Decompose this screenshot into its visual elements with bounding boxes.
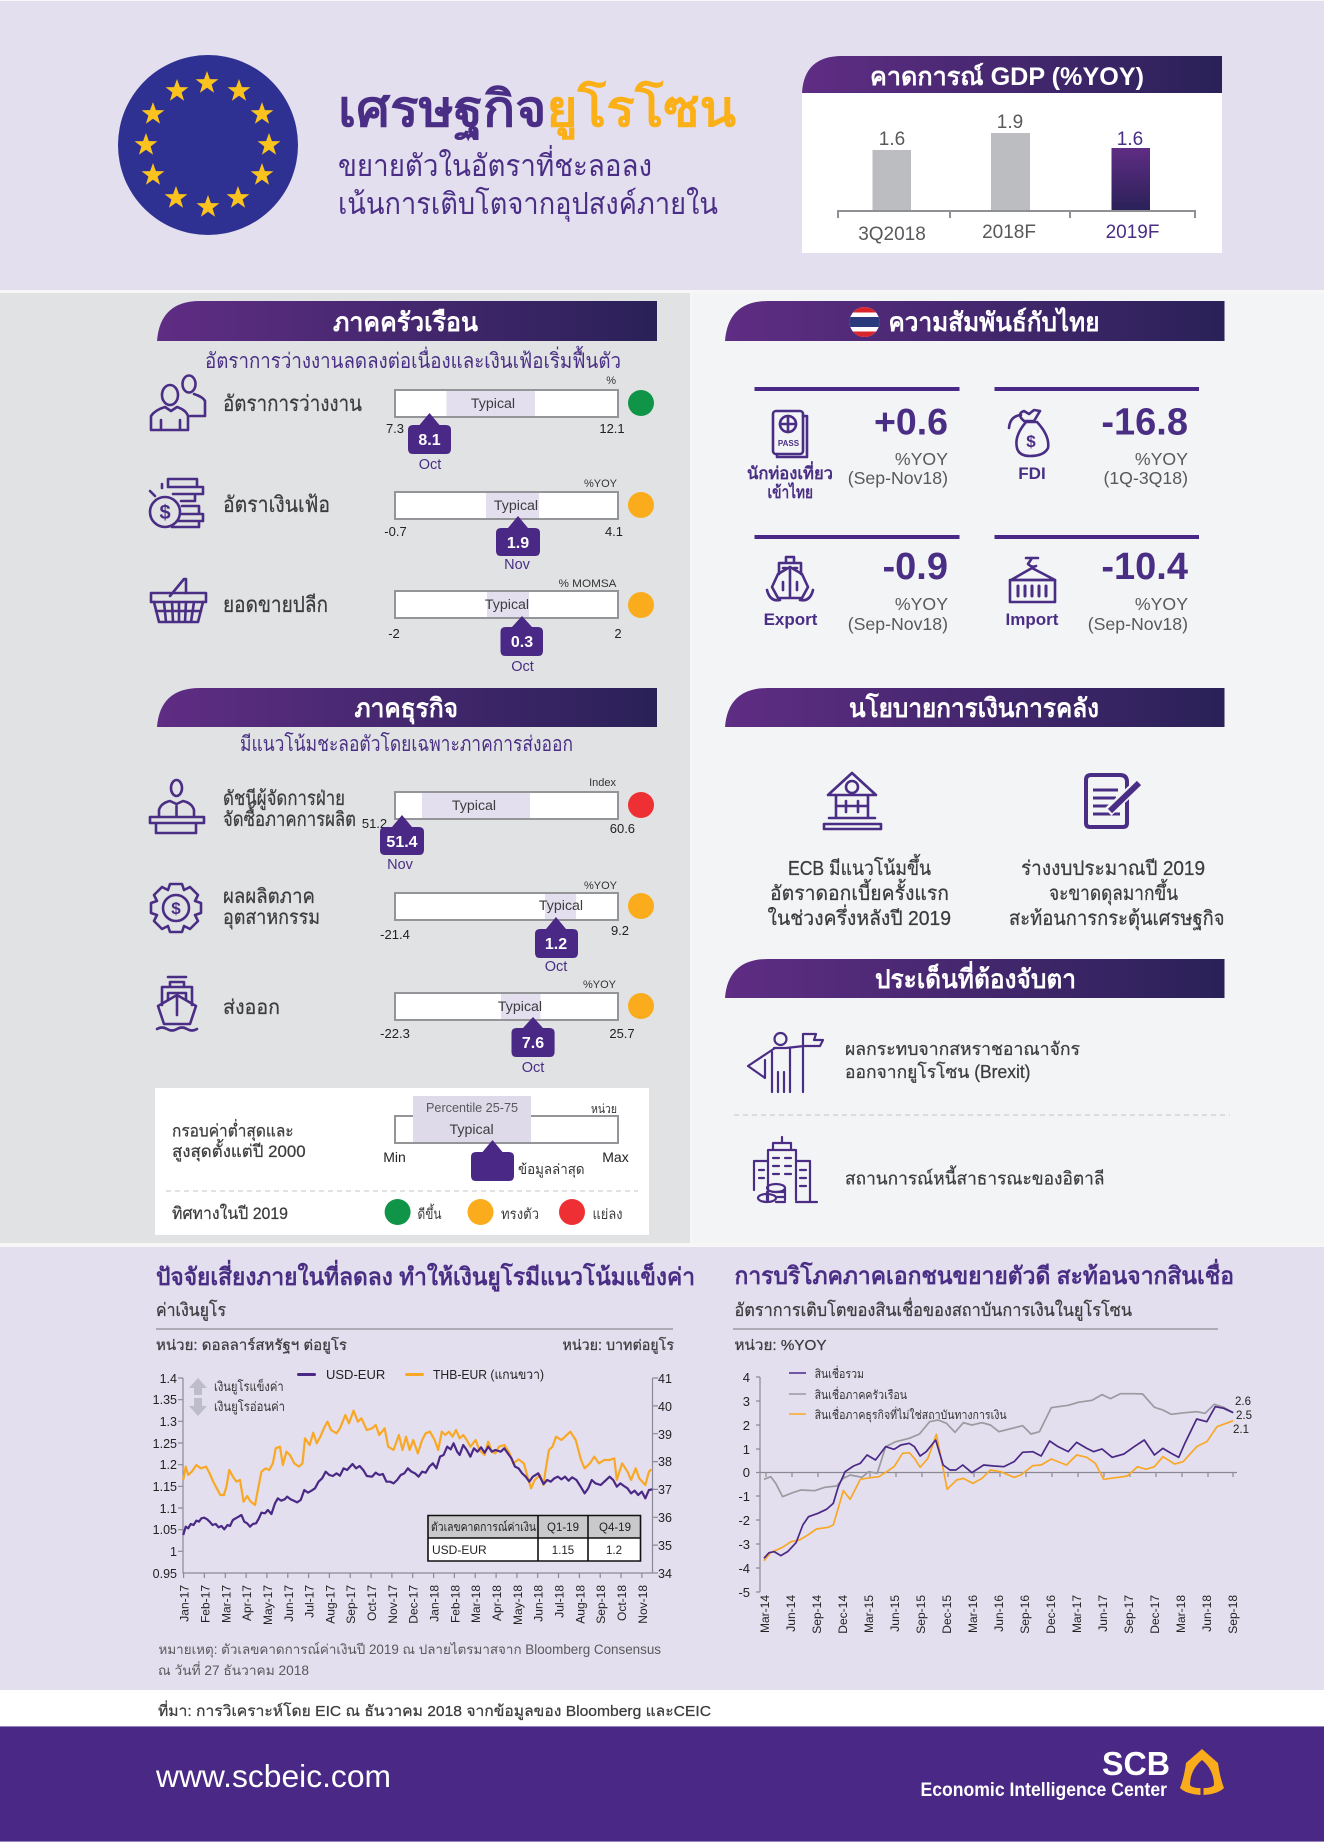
status dot	[628, 592, 654, 618]
end labels: 2.6	[1235, 1396, 1251, 1408]
range bar	[386, 375, 625, 436]
x axis labels: Feb-18	[448, 1585, 462, 1623]
x axis labels: May-17	[261, 1585, 275, 1625]
x axis labels: Jan-18	[428, 1585, 442, 1622]
value	[848, 400, 948, 488]
pointer: Oct	[522, 1060, 544, 1076]
x axis labels: Apr-17	[240, 1585, 254, 1621]
bar chart: GDP: 1.9	[997, 112, 1023, 133]
x axis labels: Sep-14	[810, 1595, 824, 1634]
y axis labels: 3	[743, 1394, 750, 1409]
heading: business: ภาคธุรกิจ	[354, 693, 458, 725]
icon: Thai flag	[849, 307, 880, 337]
pointer: Oct	[419, 457, 441, 473]
left axis labels: 1.25	[153, 1437, 177, 1451]
range bar: Typical	[539, 898, 583, 914]
range bar: Typical	[498, 999, 542, 1015]
label	[223, 788, 356, 831]
end labels: 2.5	[1236, 1410, 1252, 1422]
pointer: 0.3	[511, 634, 533, 651]
range bar: -22.3	[380, 1026, 410, 1041]
range bar: -21.4	[380, 927, 410, 942]
panel: legend	[155, 1088, 649, 1235]
x axis labels: Mar-15	[862, 1595, 876, 1633]
text: right unit: หน่วย: บาทต่อยูโร	[562, 1336, 674, 1354]
status dot	[628, 993, 654, 1019]
forecast table: USD-EUR	[432, 1543, 487, 1557]
x axis labels: Jan-17	[178, 1585, 192, 1622]
text: budget: ร่างงบประมาณปี 2019	[1021, 858, 1205, 880]
range bar	[380, 979, 635, 1041]
x axis labels: Jun-16	[992, 1595, 1006, 1632]
range bar: Typical	[485, 597, 529, 613]
icon: budget document	[1086, 775, 1139, 827]
icon: EU flag	[118, 55, 298, 235]
x axis labels: Mar-16	[966, 1595, 980, 1633]
stat: import	[994, 535, 1199, 634]
status dot	[628, 492, 654, 518]
footer	[0, 1726, 1324, 1842]
x axis labels: Oct-18	[615, 1585, 629, 1621]
range bar: 51.2	[362, 816, 387, 831]
x axis labels: Sep-17	[1122, 1595, 1136, 1634]
pointer: 7.6	[522, 1035, 544, 1052]
heading: business	[157, 688, 657, 727]
status dot	[628, 893, 654, 919]
x axis labels: Jul-17	[303, 1585, 317, 1618]
text: direction: ทิศทางในปี 2019	[172, 1203, 288, 1223]
icon label: PASS: PASS	[778, 439, 800, 448]
direction arrows: เงินยูโรอ่อนค่า	[214, 1399, 285, 1415]
left axis labels: 1.3	[160, 1415, 177, 1429]
note	[158, 1641, 661, 1678]
x axis labels	[758, 1595, 1240, 1634]
range bar: 12.1	[599, 421, 625, 436]
label: ผลผลิตภาค	[223, 886, 315, 908]
x axis labels: Apr-18	[490, 1585, 504, 1621]
icon: basket	[151, 579, 206, 622]
value: %YOY	[895, 594, 948, 614]
x axis labels: Jun-15	[888, 1595, 902, 1632]
label: ส่งออก	[223, 997, 280, 1019]
value: %YOY	[895, 449, 948, 469]
chart legend: สินเชื่อภาคธุรกิจที่ไม่ใช่สถาบันทางการเงิน	[815, 1406, 1007, 1423]
series: USD-EUR	[183, 1443, 652, 1535]
range bar: %YOY	[583, 979, 617, 991]
range bar: Typical	[471, 396, 515, 412]
pointer: Oct	[511, 659, 534, 675]
label: Import	[1006, 610, 1059, 629]
left axis labels: 1.2	[160, 1458, 177, 1472]
pointer: 51.4	[386, 834, 418, 851]
pointer: Nov	[504, 557, 531, 573]
range bar: %	[606, 375, 616, 387]
right axis labels: 34	[658, 1567, 672, 1581]
direction legend: ดีขึ้น	[418, 1203, 442, 1223]
bar chart: GDP: 2019F	[1106, 222, 1159, 243]
x axis labels: Jun-17	[282, 1585, 296, 1622]
x axis labels: Jun-18	[1200, 1595, 1214, 1632]
label: Export	[764, 610, 818, 629]
x axis labels: Jun-17	[1096, 1595, 1110, 1632]
bar chart: GDP: 2018F	[982, 222, 1036, 243]
range bar: 60.6	[610, 821, 635, 836]
icon: passport	[773, 411, 807, 457]
heading: monetary and fiscal policy	[725, 688, 1224, 727]
forecast table: 1.2	[606, 1545, 622, 1557]
range bar: 2	[614, 626, 622, 641]
row: industrial production	[151, 880, 654, 975]
y axis labels: -3	[738, 1537, 750, 1552]
icon: ship	[157, 977, 197, 1030]
x axis labels: Mar-14	[758, 1595, 772, 1633]
right axis labels: 38	[658, 1455, 672, 1469]
x axis labels: Dec-14	[836, 1595, 850, 1634]
pointer: Nov	[387, 857, 414, 873]
range bar	[384, 478, 623, 539]
range bar: %YOY	[584, 880, 618, 892]
value	[1101, 402, 1188, 488]
value	[848, 546, 948, 634]
range bar: Typical	[452, 798, 496, 814]
end labels	[1233, 1396, 1252, 1436]
value: %YOY	[1135, 594, 1188, 614]
range bar: %YOY	[584, 478, 618, 490]
x axis labels: Sep-18	[1226, 1595, 1240, 1634]
text: Brexit: ออกจากยูโรโซน (Brexit)	[845, 1061, 1030, 1083]
x axis labels: Aug-17	[323, 1585, 337, 1624]
x axis labels: Sep-17	[344, 1585, 358, 1624]
panel: left economy column	[0, 293, 690, 1243]
y axis labels	[738, 1370, 750, 1600]
range bar	[362, 777, 635, 836]
label: นักท่องเที่ยว	[747, 461, 833, 483]
pointer	[535, 917, 578, 975]
y axis labels: 2	[743, 1418, 750, 1433]
title: เศรษฐกิจ ยูโรโซน	[338, 79, 736, 141]
y axis labels: -2	[738, 1513, 750, 1528]
text: credit unit: หน่วย: %YOY	[734, 1338, 827, 1354]
value: (Sep-Nov18)	[848, 468, 948, 488]
chart legend: สินเชื่อรวม	[815, 1365, 864, 1381]
label: จัดซื้อภาคการผลิต	[223, 805, 356, 831]
status dot	[628, 390, 654, 416]
value: (Sep-Nov18)	[848, 614, 948, 634]
icon: coins	[150, 479, 203, 527]
forecast table: Q4-19	[599, 1522, 631, 1534]
top band	[0, 1, 1324, 290]
direction arrows	[189, 1377, 285, 1416]
x axis labels: Jun-18	[532, 1585, 546, 1622]
x axis labels	[178, 1585, 650, 1625]
sample range bar	[383, 1096, 629, 1165]
y axis labels: -1	[738, 1489, 750, 1504]
value: -10.4	[1101, 546, 1188, 588]
end labels: 2.1	[1233, 1424, 1249, 1436]
chart legend: THB-EUR (แกนขวา)	[433, 1367, 544, 1382]
range bar: 7.3	[386, 421, 404, 436]
icon: city with coins	[754, 1137, 817, 1202]
pointer: 1.9	[507, 535, 529, 552]
value	[1088, 546, 1188, 634]
line chart: euro	[153, 1367, 672, 1625]
x axis labels: Dec-17	[1148, 1595, 1162, 1634]
range bar: 9.2	[611, 923, 629, 938]
text: source: ที่มา: การวิเคราะห์โดย EIC ณ ธันวาคม 2018 จากข้อมูลของ Bloomberg และCEIC	[158, 1700, 711, 1720]
logo: SCB: Economic Intelligence Center	[920, 1779, 1167, 1801]
text: euro subtitle: ค่าเงินยูโร	[156, 1299, 226, 1321]
left axis labels: 1	[170, 1545, 177, 1559]
direction legend	[385, 1199, 622, 1225]
text: ECB: ECB มีแนวโน้มขึ้น	[788, 854, 931, 880]
x axis labels: Dec-16	[1044, 1595, 1058, 1634]
text: range explanation: สูงสุดตั้งแต่ปี 2000	[172, 1139, 306, 1162]
heading: GDP forecast: คาดการณ์ GDP (%YOY)	[870, 62, 1144, 91]
heading: households: ภาคครัวเรือน	[333, 307, 478, 337]
range bar: Typical	[494, 498, 538, 514]
x axis labels: Aug-18	[573, 1585, 587, 1624]
forecast table: Q1-19	[547, 1522, 579, 1534]
series: household credit	[764, 1394, 1233, 1497]
x axis labels: Dec-17	[407, 1585, 421, 1624]
bar chart: GDP: 3Q2018	[858, 224, 926, 245]
x axis labels: Dec-15	[940, 1595, 954, 1634]
x axis labels: Sep-15	[914, 1595, 928, 1634]
range bar: % MOMSA	[558, 578, 617, 590]
left axis labels: 0.95	[153, 1567, 177, 1581]
series: THB-EUR	[183, 1411, 651, 1505]
logo: SCB	[920, 1745, 1224, 1801]
bar chart: GDP: 1.6	[1117, 129, 1143, 150]
y axis labels: 0	[743, 1465, 750, 1480]
text: ECB	[768, 854, 951, 930]
label: ดัชนีผู้จัดการฝ่าย	[223, 788, 345, 811]
x axis labels: Nov-18	[636, 1585, 650, 1624]
right axis labels: 37	[658, 1483, 672, 1497]
range bar: -0.7	[384, 524, 407, 539]
x axis labels: Mar-18	[1174, 1595, 1188, 1633]
sample pointer	[471, 1140, 584, 1181]
x axis labels: Nov-17	[386, 1585, 400, 1624]
text: website: www.scbeic.com	[155, 1758, 391, 1794]
label: FDI	[1018, 464, 1046, 483]
text: left unit: หน่วย: ดอลลาร์สหรัฐฯ ต่อยูโร	[156, 1336, 347, 1354]
right axis labels: 41	[658, 1372, 672, 1386]
value: -0.9	[883, 546, 948, 588]
range bar	[380, 880, 629, 942]
icon: people	[151, 376, 205, 430]
right axis labels: 36	[658, 1511, 672, 1525]
chart legend: สินเชื่อภาคครัวเรือน	[815, 1386, 907, 1402]
heading: households	[157, 301, 657, 341]
panel: GDP forecast	[802, 56, 1222, 253]
value: -16.8	[1101, 402, 1188, 444]
status dot	[628, 792, 654, 818]
heading: GDP forecast	[802, 56, 1222, 93]
text: Brexit: ผลกระทบจากสหราชอาณาจักร	[845, 1039, 1080, 1059]
heading: relation with Thailand: ความสัมพันธ์กับไทย	[888, 306, 1100, 337]
bar chart: GDP	[838, 112, 1195, 245]
stat: export	[754, 535, 960, 634]
sample range bar: Min	[383, 1149, 406, 1165]
icon glyph: dollar: $	[171, 899, 181, 918]
label: ยอดขายปลีก	[223, 592, 328, 617]
stat: FDI	[994, 387, 1199, 488]
forecast table: 1.15	[552, 1545, 574, 1557]
x axis labels: Jul-18	[552, 1585, 566, 1618]
pointer: 1.2	[545, 936, 567, 953]
label: อัตราการว่างงาน	[223, 391, 362, 416]
chart legend	[789, 1365, 1007, 1423]
line chart: credit	[738, 1365, 1252, 1634]
label	[747, 461, 833, 502]
chart legend	[297, 1367, 544, 1382]
forecast table	[428, 1516, 640, 1561]
heading: issues to watch: ประเด็นที่ต้องจับตา	[875, 960, 1076, 994]
text: Italy debt: สถานการณ์หนี้สาธารณะของอิตาลี	[845, 1166, 1104, 1188]
forecast table: ตัวเลขคาดการณ์ค่าเงิน	[431, 1520, 536, 1534]
x axis labels: Jun-14	[784, 1595, 798, 1632]
direction arrows: เงินยูโรแข็งค่า	[214, 1377, 284, 1395]
left axis labels: 1.4	[160, 1372, 177, 1386]
value: (1Q-3Q18)	[1103, 468, 1188, 488]
heading: monetary and fiscal policy: นโยบายการเงินการคลัง	[849, 692, 1099, 723]
icon: podium speaker	[150, 780, 204, 833]
icon: Brexit leader with flag	[748, 1033, 823, 1092]
x axis labels: Sep-16	[1018, 1595, 1032, 1634]
icon: bank	[824, 773, 881, 829]
text: budget	[1009, 858, 1224, 931]
pointer	[380, 815, 424, 873]
label: อุตสาหกรรม	[223, 907, 320, 930]
x axis labels: Mar-17	[1070, 1595, 1084, 1633]
y axis labels: 4	[743, 1370, 750, 1385]
left axis labels: 1.35	[153, 1393, 177, 1407]
right axis labels: 40	[658, 1400, 672, 1414]
icon glyph: dollar: $	[1026, 432, 1036, 451]
y axis labels: 1	[743, 1442, 750, 1457]
pointer	[408, 413, 451, 473]
chart legend: USD-EUR	[326, 1367, 385, 1382]
note: หมายเหตุ: ตัวเลขคาดการณ์ค่าเงินปี 2019 ณ ปลายไตรมาสจาก Bloomberg Consensus	[158, 1641, 661, 1658]
pointer	[496, 516, 540, 573]
subtitle: เน้นการเติบโตจากอุปสงค์ภายใน	[338, 186, 718, 223]
left axis labels	[153, 1372, 177, 1581]
source strip	[0, 1690, 1324, 1726]
x axis labels: Mar-18	[469, 1585, 483, 1623]
value: +0.6	[874, 400, 948, 442]
icon: ship	[767, 557, 813, 600]
x axis labels: Feb-17	[198, 1585, 212, 1623]
x axis labels: May-18	[511, 1585, 525, 1625]
sample pointer: ข้อมูลล่าสุด	[518, 1161, 584, 1178]
heading: relation with Thailand	[725, 301, 1224, 341]
row: PMI	[150, 777, 654, 873]
left axis labels: 1.05	[153, 1523, 177, 1537]
range bar: 25.7	[609, 1026, 635, 1041]
text: budget: สะท้อนการกระตุ้นเศรษฐกิจ	[1009, 908, 1224, 931]
x axis labels: Sep-18	[594, 1585, 608, 1624]
text: budget: จะขาดดุลมากขึ้น	[1049, 879, 1178, 906]
left axis labels: 1.15	[153, 1480, 177, 1494]
subtitle: ขยายตัวในอัตราที่ชะลอลง	[338, 145, 652, 183]
text: credit subtitle: อัตราการเติบโตของสินเชื่อของสถาบันการเงินในยูโรโซน	[734, 1297, 1132, 1321]
pointer	[500, 616, 543, 675]
value: %YOY	[1135, 449, 1188, 469]
row: retail sales	[151, 578, 654, 675]
series: total credit	[764, 1407, 1233, 1558]
text: ECB: ในช่วงครึ่งหลังปี 2019	[768, 904, 951, 930]
heading: issues to watch	[725, 959, 1224, 998]
pointer	[512, 1017, 555, 1076]
pointer: 8.1	[418, 432, 441, 449]
direction legend: แย่ลง	[592, 1207, 622, 1223]
sample range bar: Max	[602, 1149, 629, 1165]
range bar: Index	[589, 777, 616, 789]
text: Brexit	[845, 1039, 1080, 1083]
label	[223, 886, 320, 930]
heading: credit chart: การบริโภคภาคเอกชนขยายตัวดี สะท้อนจากสินเชื่อ	[734, 1258, 1234, 1290]
range bar: -2	[388, 626, 400, 641]
logo: SCB: SCB	[1102, 1745, 1170, 1782]
y axis labels: -4	[738, 1561, 750, 1576]
direction legend: ทรงตัว	[501, 1207, 539, 1223]
text: households subtitle: อัตราการว่างงานลดลงต่อเนื่องและเงินเฟ้อเริ่มฟื้นตัว	[205, 346, 621, 373]
icon glyph: dollar: $	[159, 502, 171, 524]
icon: container crane	[1010, 558, 1055, 602]
text: business subtitle: มีแนวโน้มชะลอตัวโดยเฉพาะภาคการส่งออก	[240, 732, 573, 756]
row: exports	[157, 977, 654, 1076]
right axis labels	[658, 1372, 672, 1581]
panel: charts band	[0, 1247, 1324, 1690]
series: business credit	[764, 1421, 1233, 1561]
panel: right column	[725, 301, 1230, 1204]
label: เข้าไทย	[768, 482, 813, 502]
heading: euro chart: ปัจจัยเสี่ยงภายในที่ลดลง ทำให้เงินยูโรมีแนวโน้มแข็งค่า	[156, 1259, 695, 1292]
text: range explanation: กรอบค่าต่ำสุดและ	[172, 1118, 294, 1142]
range bar	[388, 578, 622, 641]
range bar: 4.1	[605, 524, 623, 539]
value: (Sep-Nov18)	[1088, 614, 1188, 634]
left axis labels: 1.1	[160, 1502, 177, 1516]
sample range bar: Percentile 25-75	[426, 1100, 518, 1115]
row: inflation	[150, 478, 654, 573]
x axis labels: Oct-17	[365, 1585, 379, 1621]
text: range explanation	[172, 1118, 306, 1162]
sample range bar: หน่วย	[591, 1102, 617, 1116]
y axis labels: -5	[738, 1585, 750, 1600]
row: unemployment	[151, 375, 654, 473]
right axis labels: 35	[658, 1539, 672, 1553]
bar chart: GDP: 1.6	[879, 129, 905, 150]
text: ECB: อัตราดอกเบี้ยครั้งแรก	[770, 879, 949, 905]
x axis labels: Mar-17	[219, 1585, 233, 1623]
stat: tourists	[747, 387, 960, 502]
pointer: Oct	[545, 959, 567, 975]
icon: gear	[151, 884, 201, 932]
note: ณ วันที่ 27 ธันวาคม 2018	[158, 1661, 309, 1678]
sample range bar: Typical	[450, 1122, 494, 1138]
icon: money bag	[1009, 410, 1048, 456]
label: อัตราเงินเฟ้อ	[223, 492, 330, 517]
right axis labels: 39	[658, 1428, 672, 1442]
subtitle	[338, 145, 718, 223]
